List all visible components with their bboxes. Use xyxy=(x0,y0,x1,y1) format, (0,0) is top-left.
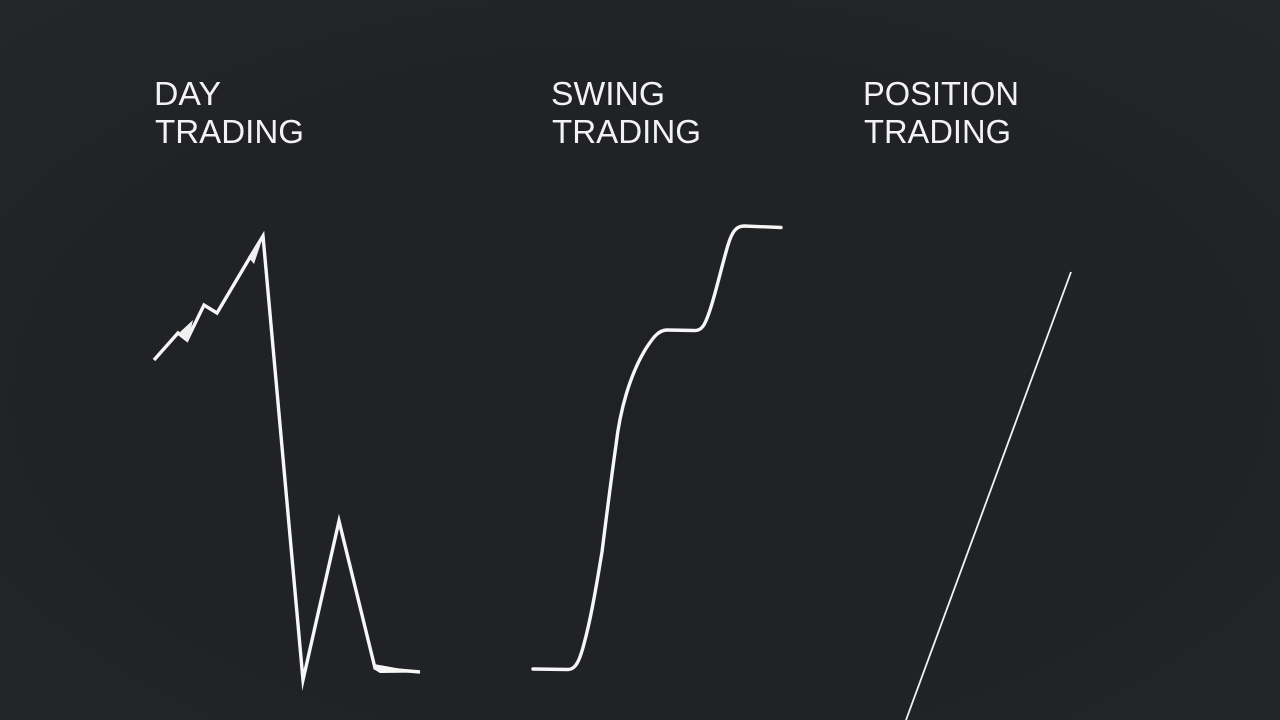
heading: position trading xyxy=(863,75,1019,150)
heading: position trading: TRADING xyxy=(864,113,1011,150)
heading: position trading: POSITION xyxy=(863,75,1019,112)
heading: day trading: DAY xyxy=(154,75,221,112)
chart: swing trading stepped curve xyxy=(533,226,781,670)
heading: swing trading: SWING xyxy=(551,75,665,112)
heading: swing trading: TRADING xyxy=(552,113,701,150)
chart: day trading volatile line xyxy=(154,236,421,680)
chart: position trading straight line xyxy=(906,272,1071,720)
heading: day trading: TRADING xyxy=(155,113,304,150)
heading: day trading xyxy=(154,75,304,150)
heading: swing trading xyxy=(551,75,701,150)
